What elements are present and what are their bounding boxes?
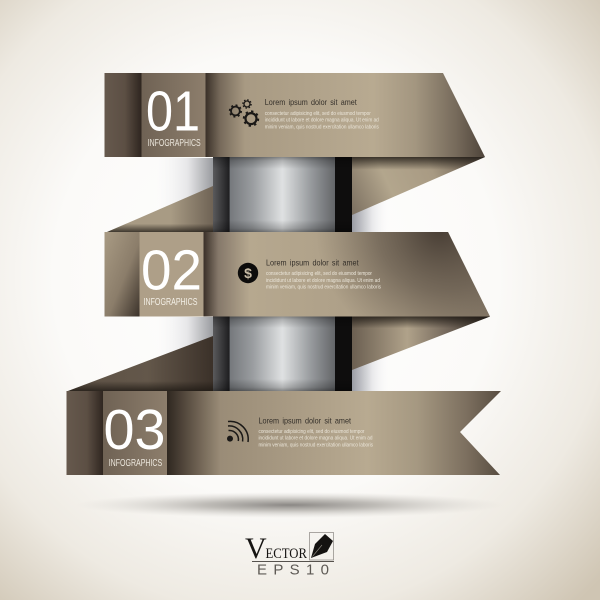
ribbon 02 end block xyxy=(104,232,140,316)
ribbon 03 number block xyxy=(103,391,167,475)
heading 02: Lorem ipsum dolor sit amet xyxy=(266,258,359,268)
ribbon 03 end block xyxy=(66,391,104,475)
body text 01: consectetur adipisicing elit, sed do eiusmod tempor xyxy=(265,111,371,117)
icon: pen nib xyxy=(310,532,334,560)
icon: gears xyxy=(230,100,258,126)
number 02: 02 xyxy=(141,238,202,302)
fold: upper left xyxy=(107,186,213,232)
ribbon 01 body xyxy=(205,73,485,157)
logo letters ECTOR: ECTOR xyxy=(266,546,307,562)
icon: signal waves xyxy=(227,421,248,442)
body text 03: minim veniam, quis nostrud exercitation ullamco laboris xyxy=(258,442,373,448)
body text 03: consectetur adipisicing elit, sed do eiusmod tempor xyxy=(258,429,365,435)
body text 02: incididunt ut labore et dolore magna aliqua. Ut enim ad xyxy=(266,278,380,284)
body text 03 xyxy=(258,429,373,448)
logo: vector eps10 xyxy=(245,532,334,578)
body text 01 xyxy=(265,111,379,130)
panel: ribbon 02 xyxy=(104,232,490,316)
ribbon 02 body xyxy=(203,232,490,316)
lower column segment xyxy=(213,316,352,391)
label infographics 02: INFOGRAPHICS xyxy=(144,297,198,308)
fold: upper right xyxy=(352,157,485,215)
body text 03: incididunt ut labore et dolore magna aliqua. Ut enim ad xyxy=(258,436,373,442)
body text 01: minim veniam, quis nostrud exercitation ullamco laboris xyxy=(265,124,379,130)
ribbon 01 end block xyxy=(104,73,142,157)
body text 02: consectetur adipisicing elit, sed do eiusmod tempor xyxy=(266,271,372,277)
ground shadow xyxy=(75,492,505,518)
logo letter V: V xyxy=(245,532,267,565)
logo rule xyxy=(252,560,334,563)
number 03: 03 xyxy=(104,398,166,462)
ribbon 02 number block xyxy=(140,232,204,316)
upper column segment xyxy=(213,157,352,232)
fold: lower left xyxy=(68,336,213,391)
body text 02: minim veniam, quis nostrud exercitation ullamco laboris xyxy=(266,284,381,290)
central column xyxy=(150,157,392,391)
white shadows beside column xyxy=(150,158,392,391)
panel: ribbon 01 xyxy=(104,73,485,157)
label infographics 01: INFOGRAPHICS xyxy=(148,138,201,149)
heading 03: Lorem ipsum dolor sit amet xyxy=(258,416,352,426)
panel: ribbon 03 xyxy=(66,391,501,475)
body text 01: incididunt ut labore et dolore magna aliqua. Ut enim ad xyxy=(265,118,379,124)
heading 01: Lorem ipsum dolor sit amet xyxy=(265,97,357,107)
logo text eps10: EPS10 xyxy=(257,562,329,578)
number 01: 01 xyxy=(146,80,200,144)
body text 02 xyxy=(266,271,381,290)
icon: dollar coin: $ xyxy=(244,265,252,281)
label infographics 03: INFOGRAPHICS xyxy=(109,458,162,469)
fold: lower right xyxy=(352,316,490,370)
icon: dollar coin xyxy=(238,263,258,283)
ribbon 01 number block xyxy=(142,73,206,157)
ribbon 03 body xyxy=(166,391,501,475)
